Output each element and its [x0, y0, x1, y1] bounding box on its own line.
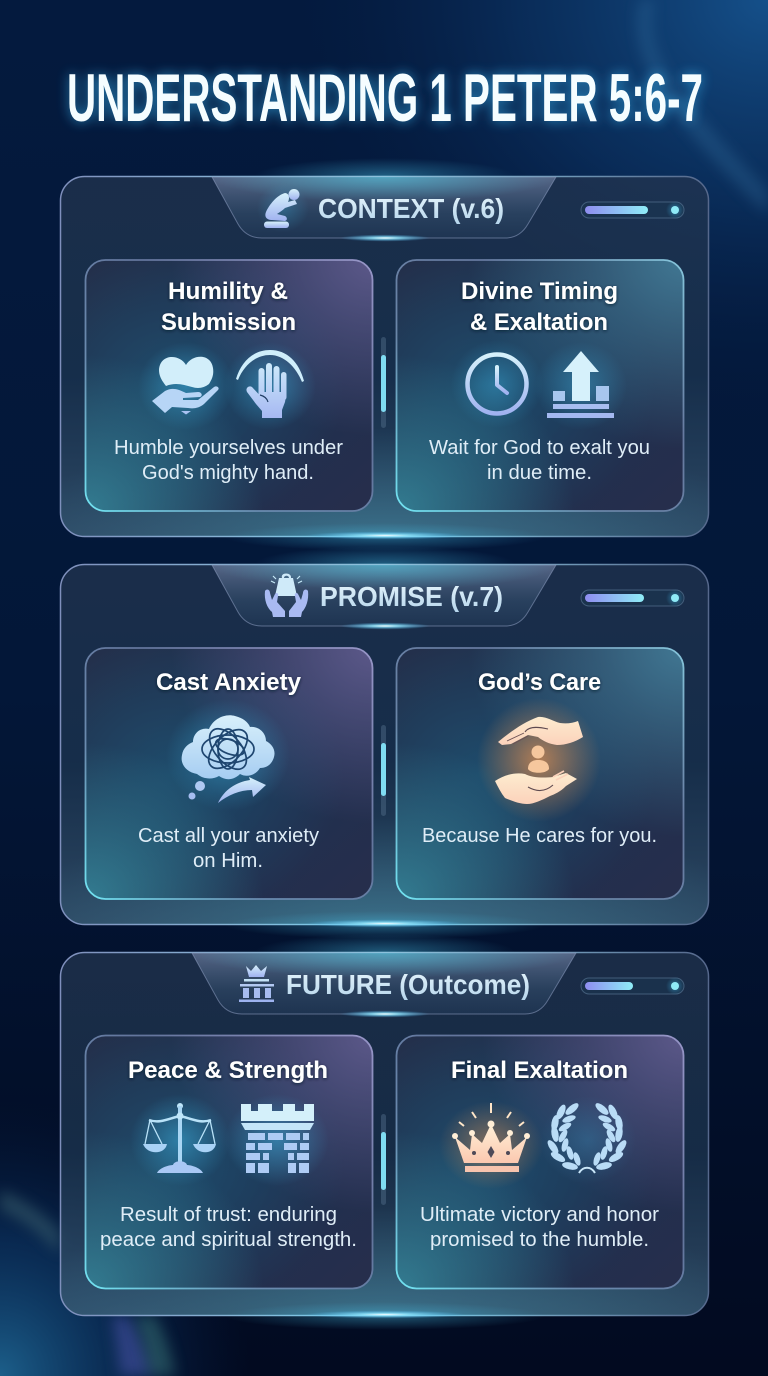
body text: promised to the humble. — [430, 1229, 649, 1251]
body text: God's mighty hand. — [142, 462, 314, 484]
card title — [461, 278, 618, 336]
panel: context — [60, 158, 708, 551]
body text — [114, 437, 343, 484]
icon: castle tower — [225, 1094, 329, 1186]
panel: future — [60, 934, 708, 1330]
icon: heart in hand — [138, 342, 234, 430]
divider slider — [381, 1114, 386, 1205]
card: final exaltation — [396, 1036, 684, 1288]
header tab: promise — [212, 565, 556, 630]
icon: tangled thought cloud with arrow — [166, 699, 290, 811]
card title: Peace & Strength — [128, 1057, 328, 1084]
card title: & Exaltation — [470, 309, 608, 336]
icon: laurel wreath — [540, 1096, 636, 1184]
panel: promise — [60, 546, 708, 939]
heading: future: FUTURE (Outcome) — [286, 969, 530, 1000]
card title: Final Exaltation — [451, 1057, 628, 1084]
card: cast anxiety — [86, 648, 372, 899]
icon: raised hand under arc — [224, 342, 316, 430]
body text: in due time. — [487, 462, 592, 484]
icon: balance scales — [130, 1094, 230, 1186]
body text: Cast all your anxiety — [138, 825, 319, 847]
icon: caring hands — [477, 698, 601, 822]
body text — [100, 1204, 357, 1251]
body text: on Him. — [193, 850, 263, 872]
body text — [429, 437, 650, 484]
card: humility and submission — [86, 260, 372, 511]
body text: Because He cares for you. — [422, 825, 657, 847]
icon: clock — [451, 340, 543, 428]
body text: Wait for God to exalt you — [429, 437, 650, 459]
progress indicator — [581, 977, 684, 995]
progress indicator — [581, 589, 684, 607]
card: peace and strength — [86, 1036, 372, 1288]
heading: context: CONTEXT (v.6) — [318, 193, 504, 224]
body text: Humble yourselves under — [114, 437, 343, 459]
body text — [138, 825, 319, 872]
heading: promise: PROMISE (v.7) — [320, 581, 503, 612]
icon: hands lifting weight — [265, 574, 308, 617]
header tab: context — [212, 177, 556, 242]
card: god's care — [396, 648, 684, 899]
card: divine timing and exaltation — [396, 260, 684, 511]
card title: Submission — [161, 309, 296, 336]
body text: peace and spiritual strength. — [100, 1229, 357, 1251]
progress indicator — [581, 201, 684, 219]
card title: Humility & — [168, 278, 288, 305]
body text: Ultimate victory and honor — [420, 1204, 659, 1226]
divider slider — [381, 337, 386, 428]
icon: radiant crown — [439, 1101, 543, 1189]
icon: crown over pillars — [239, 965, 274, 1002]
card title — [161, 278, 296, 336]
body text: Result of trust: enduring — [120, 1204, 337, 1226]
divider slider — [381, 725, 386, 816]
header tab: future — [192, 953, 576, 1018]
card title: Divine Timing — [461, 278, 618, 305]
icon: kneeling figure — [257, 184, 309, 232]
card title: Cast Anxiety — [156, 669, 302, 696]
card title: God’s Care — [478, 669, 601, 696]
icon: rising arrow on steps — [535, 342, 627, 430]
body text — [420, 1204, 659, 1251]
